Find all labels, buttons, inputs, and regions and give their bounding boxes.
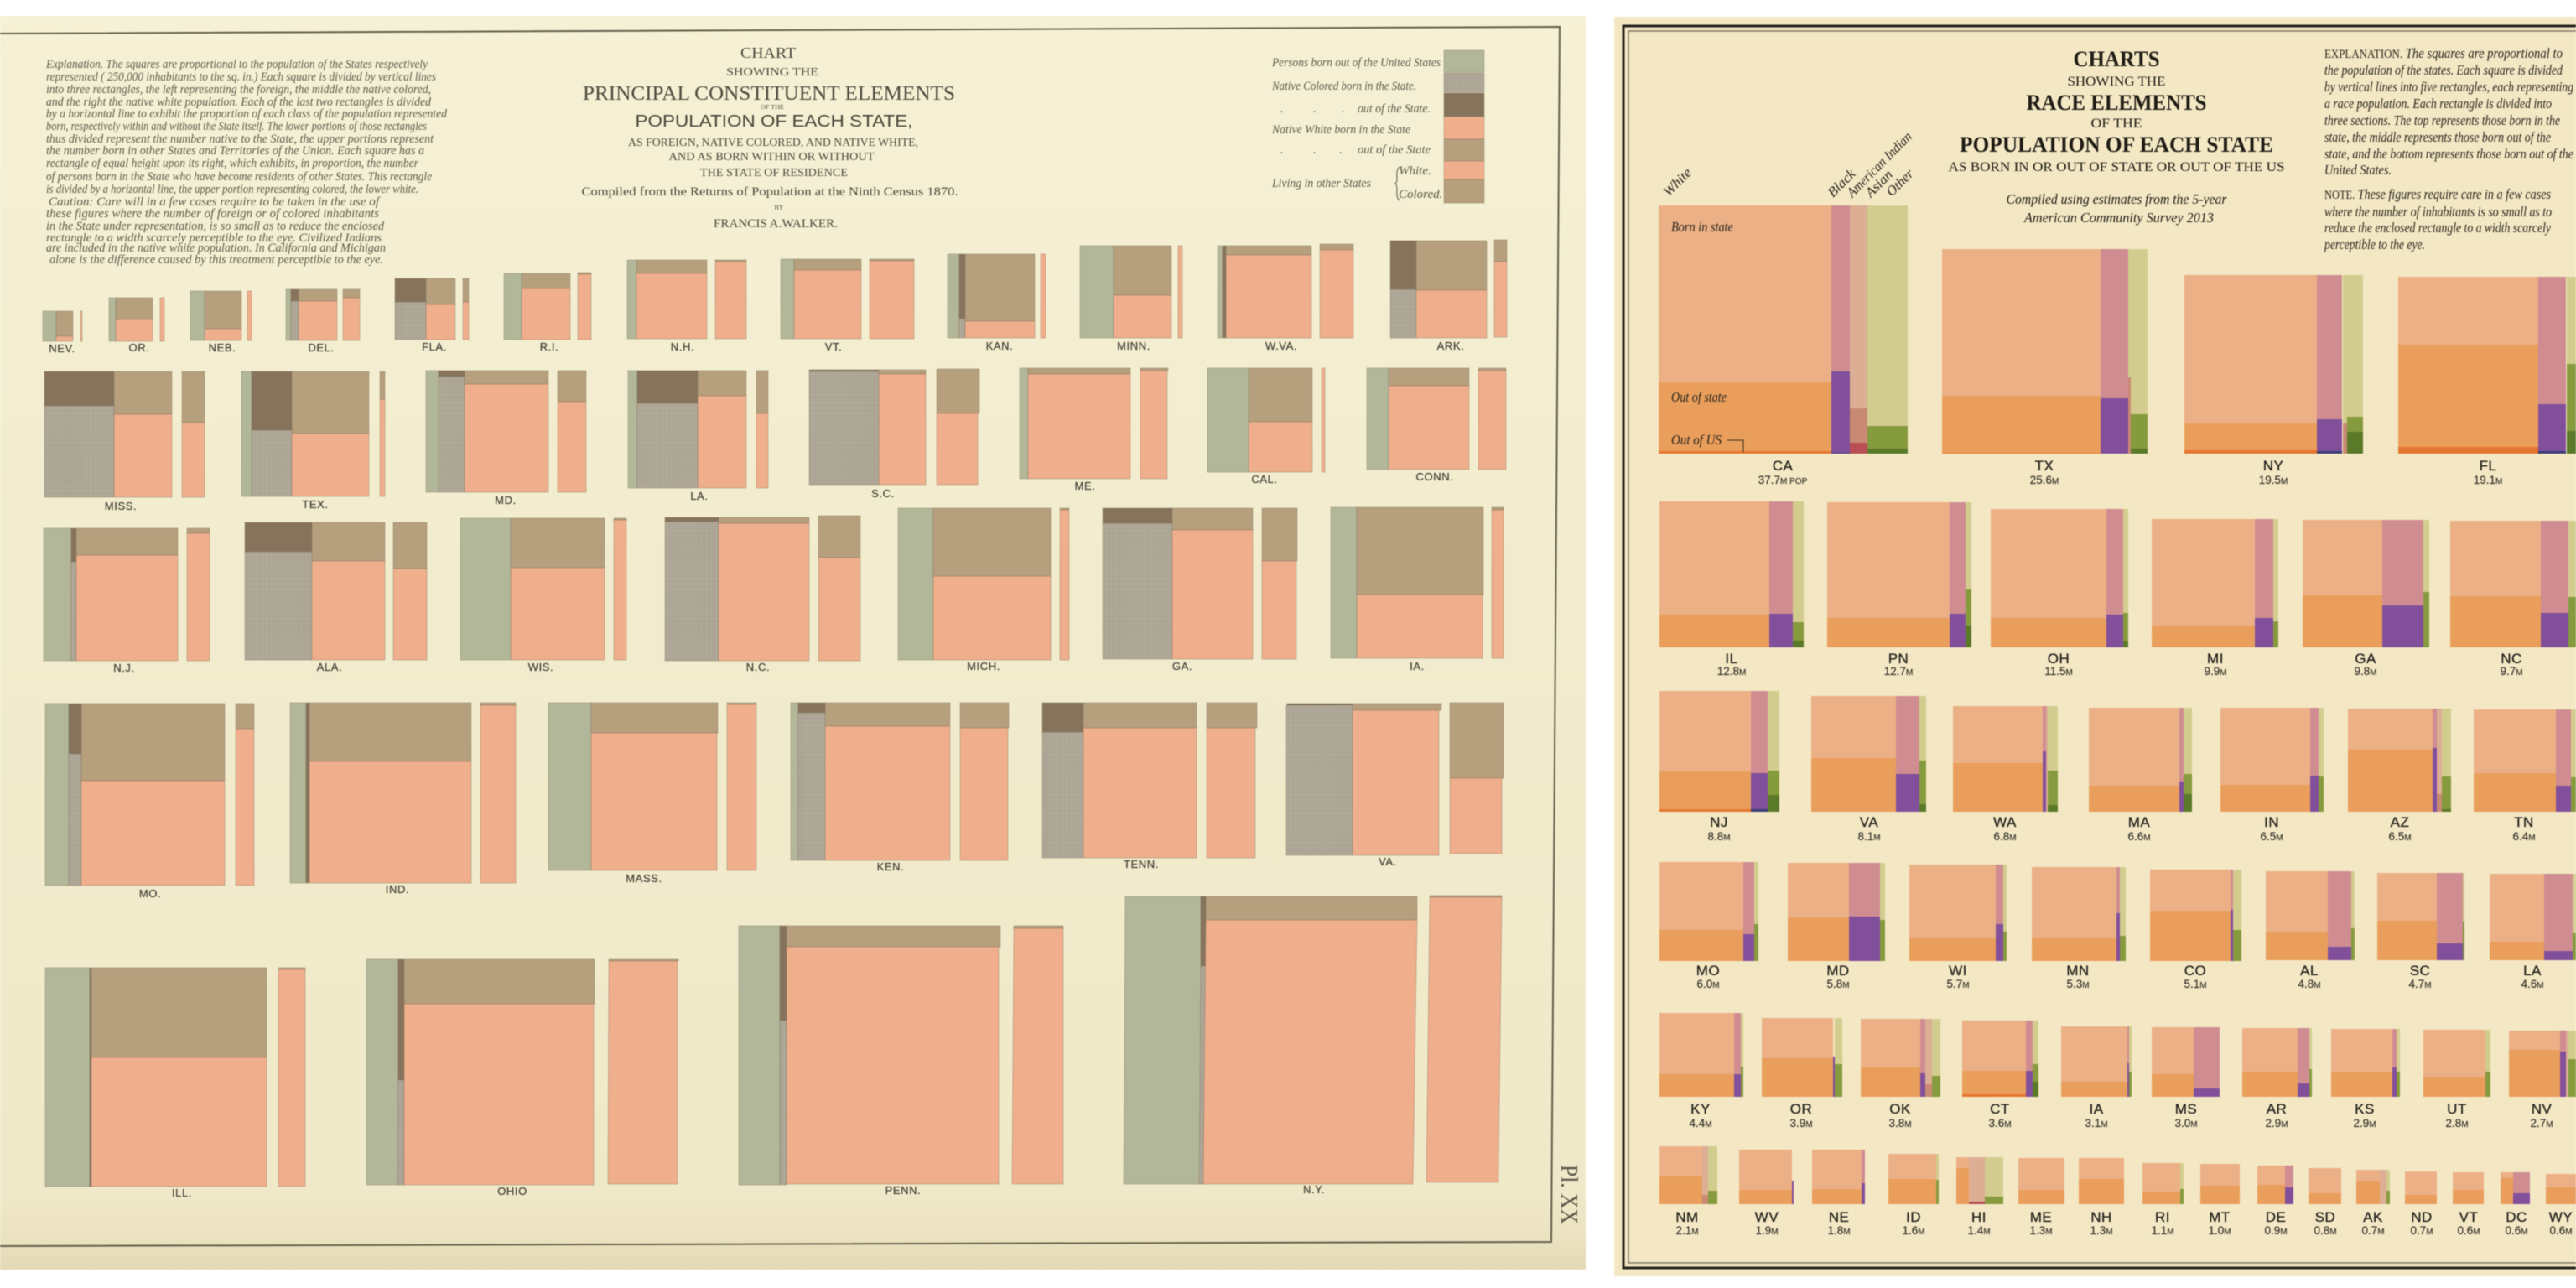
- chart: NEV: [43, 311, 82, 355]
- chart: NC (2013): 9.7M: [2500, 665, 2523, 678]
- chart: CA with column and row annotations: Other: [1883, 165, 1917, 200]
- legend: out of the State.: [1358, 102, 1431, 116]
- chart: MA: MA: [2128, 814, 2150, 830]
- chart: AR: [2242, 1028, 2312, 1130]
- chart: PN: PN: [1888, 651, 1909, 667]
- chart: NJ (2013): NJ: [1710, 814, 1728, 830]
- chart: LA (2013): [2490, 874, 2576, 990]
- chart: NH: N.H.: [671, 340, 694, 353]
- chart: WA: 6.8M: [1993, 830, 2017, 843]
- chart: DEL: [286, 289, 360, 354]
- chart: RI (2013): 1.1M: [2151, 1224, 2174, 1237]
- chart: OR (2013): OR: [1790, 1101, 1812, 1117]
- chart: CA with column and row annotations: Out of US: [1671, 432, 1722, 448]
- chart: MASS: MASS.: [626, 872, 662, 885]
- chart: SC: [809, 369, 979, 500]
- chart: FL: 19.1M: [2474, 474, 2502, 486]
- chart: KY: [1659, 1013, 1743, 1130]
- chart: ME (2013): 1.3M: [2029, 1224, 2053, 1237]
- chart: ID: ID: [1906, 1209, 1921, 1225]
- chart: AL: [2266, 871, 2355, 990]
- chart: MN: [2032, 867, 2126, 990]
- chart: DC: 0.6M: [2505, 1224, 2528, 1237]
- chart: MI: [2152, 519, 2278, 678]
- title block: SHOWING THE: [2068, 75, 2165, 89]
- chart: KAN: [948, 254, 1046, 352]
- note text: NOTE. These figures require care in a few cases: [2324, 186, 2551, 202]
- explanation text: by a horizontal line to exhibit the proportion of each class of the population represented: [46, 107, 447, 121]
- chart: NC: [665, 516, 860, 673]
- chart: ALA: ALA.: [317, 661, 342, 673]
- chart: ILL: [45, 968, 305, 1199]
- explanation text: United States.: [2324, 162, 2392, 178]
- chart: IA: IA.: [1410, 660, 1425, 673]
- chart: IL: 12.8M: [1717, 665, 1746, 678]
- chart: FLA: [395, 278, 469, 353]
- chart: NH: [627, 260, 746, 353]
- chart: PENN: [739, 926, 1063, 1197]
- chart: NY (1870): N.Y.: [1303, 1183, 1325, 1196]
- chart: MO (2013): MO: [1696, 963, 1720, 979]
- chart: AK: 0.7M: [2361, 1224, 2385, 1237]
- legend: Living in other States: [1271, 177, 1371, 190]
- chart: ID: [1888, 1154, 1939, 1237]
- chart: CO: CO: [2184, 963, 2206, 979]
- chart: NV: [2509, 1031, 2576, 1130]
- chart: DE: DE: [2266, 1209, 2286, 1225]
- chart: OH: 11.5M: [2044, 665, 2073, 678]
- legend: [1271, 50, 1484, 203]
- chart: DE: 0.9M: [2264, 1224, 2288, 1237]
- explanation text: born, respectively within and without the State itself. The lower portions of those rectangles: [46, 120, 427, 133]
- chart: OR (2013): [1762, 1018, 1842, 1130]
- chart: SC (2013): 4.7M: [2408, 978, 2432, 990]
- chart: NJ: N.J.: [113, 662, 135, 674]
- chart: MISS: MISS.: [105, 500, 137, 512]
- chart: AL: 4.8M: [2298, 978, 2321, 990]
- legend: .: [1339, 143, 1343, 157]
- chart: CA with column and row annotations: [1659, 128, 1917, 486]
- chart: VA (1870): VA.: [1379, 855, 1397, 868]
- chart: NJ: [44, 528, 210, 674]
- chart: ARK: [1390, 240, 1507, 352]
- explanation text: these figures where the number of foreign or of colored inhabitants: [46, 207, 379, 221]
- chart: RI: R.I.: [540, 340, 558, 353]
- chart: KEN: KEN.: [877, 860, 904, 873]
- chart: MINN: MINN.: [1117, 340, 1150, 352]
- chart: WA: [1953, 706, 2058, 843]
- chart: VA (2013): VA: [1860, 814, 1878, 830]
- chart: WIS: [460, 518, 626, 673]
- chart: MD: MD.: [495, 494, 517, 506]
- chart: HI: HI: [1971, 1209, 1987, 1225]
- chart: CA with column and row annotations: CA: [1773, 458, 1793, 474]
- chart: NEV: NEV.: [49, 342, 75, 355]
- chart: NE: [1812, 1150, 1865, 1237]
- chart: MI: 9.9M: [2204, 665, 2227, 678]
- chart: SC: S.C.: [871, 487, 895, 500]
- chart: VT (2013): 0.6M: [2457, 1224, 2480, 1237]
- chart: KY: 4.4M: [1689, 1117, 1712, 1130]
- title block: AS BORN IN OR OUT OF STATE OR OUT OF THE US: [1949, 160, 2284, 174]
- chart: PENN: PENN.: [886, 1184, 921, 1197]
- chart: CT: CT: [1990, 1101, 2010, 1117]
- chart: NY (1870): [1124, 896, 1502, 1196]
- chart: MT: 1.0M: [2208, 1224, 2231, 1237]
- chart: CA with column and row annotations: Asian: [1862, 167, 1896, 201]
- chart: TEX: [242, 371, 385, 511]
- chart: NJ (2013): 8.8M: [1707, 830, 1731, 843]
- legend: Persons born out of the United States: [1271, 56, 1441, 70]
- plate number: Pl. XX: [1555, 1165, 1581, 1224]
- chart: OR: OR.: [129, 341, 149, 354]
- explanation text: Caution: Care will in a few cases require to be taken in the use of: [49, 195, 381, 209]
- explanation text: Explanation. The squares are proportional to the population of the States respectively: [45, 58, 428, 71]
- chart: WY: 0.6M: [2549, 1224, 2573, 1237]
- chart: RI (2013): [2142, 1163, 2184, 1237]
- note text: perceptible to the eye.: [2324, 236, 2425, 252]
- title block: American Community Survey 2013: [2023, 210, 2214, 226]
- explanation text: [45, 58, 447, 267]
- chart: AL: AL: [2300, 963, 2319, 979]
- chart: OR (2013): 3.9M: [1789, 1117, 1813, 1130]
- chart: NY: NY: [2263, 458, 2283, 474]
- chart: KY: KY: [1690, 1101, 1711, 1117]
- chart: MD: [426, 371, 586, 506]
- chart: PN: [1827, 502, 1971, 678]
- chart: SD: 0.8M: [2314, 1224, 2337, 1237]
- chart: DC: DC: [2506, 1209, 2527, 1225]
- chart: NC (2013): NC: [2501, 651, 2522, 667]
- explanation text: represented ( 250,000 inhabitants to the sq. in.) Each square is divided by vertical lines: [46, 70, 436, 84]
- chart: AR: AR: [2267, 1101, 2287, 1117]
- chart: NH (2013): 1.3M: [2090, 1224, 2113, 1237]
- chart: MO (2013): 6.0M: [1696, 978, 1720, 990]
- chart: IN: [2220, 708, 2324, 843]
- chart: NH (2013): NH: [2090, 1209, 2112, 1225]
- chart: PN: 12.7M: [1884, 665, 1913, 678]
- chart: VT: [781, 259, 914, 353]
- panel: 1870 Walker chart: [0, 16, 1586, 1270]
- title block: PRINCIPAL CONSTITUENT ELEMENTS: [583, 83, 955, 105]
- legend: .: [1342, 102, 1345, 116]
- chart: CA with column and row annotations: White: [1659, 164, 1695, 200]
- chart: AK: AK: [2363, 1209, 2383, 1225]
- chart: MICH: MICH.: [967, 660, 1000, 673]
- chart: CAL: [1208, 368, 1325, 486]
- chart: CT: [1962, 1021, 2038, 1130]
- chart: NEB: NEB.: [209, 341, 236, 354]
- legend: White.: [1399, 164, 1431, 178]
- legend: Native Colored born in the State.: [1271, 80, 1416, 93]
- title block: OF THE: [2091, 117, 2142, 131]
- chart: CA with column and row annotations: Born in state: [1671, 219, 1733, 235]
- chart: AK: [2356, 1170, 2390, 1237]
- chart: MASS: [548, 703, 756, 885]
- chart: NE: 1.8M: [1827, 1224, 1851, 1237]
- explanation text: alone is the difference caused by this treatment perceptible to the eye.: [49, 253, 383, 267]
- chart: ILL: ILL.: [172, 1187, 192, 1199]
- chart: VA (2013): 8.1M: [1857, 830, 1881, 843]
- title block: AND AS BORN WITHIN OR WITHOUT: [669, 150, 875, 163]
- chart: KEN: [791, 703, 1009, 873]
- chart: NC: N.C.: [746, 661, 770, 673]
- chart: UT: 2.8M: [2445, 1117, 2469, 1130]
- chart: VA (2013): [1811, 696, 1926, 843]
- chart: CA with column and row annotations: Black: [1824, 165, 1859, 200]
- title block: Compiled from the Returns of Population at the Ninth Census 1870.: [582, 185, 958, 199]
- chart: OH: OH: [2048, 651, 2070, 667]
- explanation text: thus divided represent the number native to the State, the upper portions represent: [46, 132, 434, 146]
- chart: MT: [2200, 1164, 2240, 1237]
- legend: .: [1313, 102, 1317, 116]
- chart: ID: 1.6M: [1902, 1224, 1925, 1237]
- chart: VT (2013): VT: [2459, 1209, 2478, 1225]
- chart: VT (2013): [2453, 1172, 2484, 1237]
- chart: NV: NV: [2532, 1101, 2552, 1117]
- title block: BY: [774, 204, 784, 211]
- chart: ME: ME.: [1075, 480, 1095, 492]
- title block: OF THE: [761, 104, 784, 111]
- chart: LA (2013): 4.6M: [2521, 978, 2544, 990]
- chart: MS: MS: [2175, 1101, 2197, 1117]
- chart: FL: FL: [2480, 458, 2496, 474]
- chart: FL: [2398, 277, 2576, 486]
- chart: MN: MN: [2066, 963, 2090, 979]
- chart: WV: [1739, 1150, 1794, 1237]
- chart: NJ (2013): [1659, 691, 1779, 843]
- chart: MS: [2152, 1027, 2220, 1130]
- explanation text: are included in the native white population. In California and Michigan: [46, 242, 386, 255]
- chart: ARK: ARK.: [1437, 340, 1464, 352]
- chart: KS: 2.9M: [2353, 1117, 2376, 1130]
- chart: OK: 3.8M: [1888, 1117, 1912, 1130]
- title block: FRANCIS A.WALKER.: [714, 217, 838, 231]
- chart: LA: LA.: [690, 490, 709, 502]
- chart: MICH: [898, 508, 1069, 673]
- legend: Colored.: [1399, 188, 1442, 201]
- chart: ALA: [245, 522, 427, 673]
- chart: KAN: KAN.: [986, 340, 1013, 352]
- chart: CO: 5.1M: [2184, 978, 2207, 990]
- chart: OHIO: OHIO: [497, 1185, 527, 1197]
- chart: IL: IL: [1725, 651, 1738, 667]
- chart: CONN: CONN.: [1416, 470, 1453, 483]
- legend: Native White born in the State: [1271, 123, 1410, 137]
- chart: WA: WA: [1993, 814, 2017, 830]
- chart: IL: [1659, 501, 1804, 678]
- chart: MA: 6.6M: [2127, 830, 2151, 843]
- chart: NC (2013): [2450, 521, 2576, 678]
- chart: HI: [1956, 1157, 2003, 1237]
- legend: .: [1280, 143, 1284, 157]
- chart: WY: WY: [2549, 1209, 2573, 1225]
- title block: [582, 44, 958, 231]
- chart: VT: VT.: [825, 340, 842, 353]
- chart: TN: 6.4M: [2512, 830, 2536, 843]
- chart: CA with column and row annotations: 37.7M POP: [1758, 474, 1808, 486]
- chart: MINN: [1080, 246, 1182, 352]
- chart: TN: [2474, 709, 2576, 843]
- chart: LA (2013): LA: [2523, 963, 2542, 979]
- chart: GA (2013): [2303, 520, 2429, 678]
- explanation text: rectangle to a width scarcely perceptible to the eye. Civilized Indians: [46, 231, 382, 245]
- chart: CA with column and row annotations: Out of state: [1671, 389, 1727, 405]
- legend: .: [1313, 143, 1317, 157]
- explanation text: the number born in other States and Territories of the Union. Each square has a: [46, 144, 424, 158]
- chart: NM: 2.1M: [1675, 1224, 1699, 1237]
- chart: DC: [2501, 1172, 2530, 1237]
- chart: MD (2013): MD: [1826, 963, 1850, 979]
- chart: NV: 2.7M: [2530, 1117, 2553, 1130]
- title block: Compiled using estimates from the 5-year: [2006, 191, 2227, 207]
- chart: KS: [2331, 1029, 2400, 1130]
- chart: UT: UT: [2447, 1101, 2467, 1117]
- chart: CT: 3.6M: [1988, 1117, 2012, 1130]
- chart: MN: 5.3M: [2066, 978, 2090, 990]
- chart: IA (2013): [2061, 1026, 2132, 1130]
- chart: RI (2013): RI: [2155, 1209, 2170, 1225]
- chart: FLA: FLA.: [422, 340, 447, 353]
- chart: WV: 1.9M: [1755, 1224, 1779, 1237]
- chart: MD (2013): 5.8M: [1826, 978, 1850, 990]
- chart: MO: [45, 704, 254, 900]
- chart: TX: 25.6M: [2030, 474, 2059, 486]
- chart: ME (2013): ME: [2030, 1209, 2052, 1225]
- chart: MA: [2089, 708, 2192, 843]
- chart: OHIO: [366, 959, 678, 1197]
- chart: SC (2013): [2377, 873, 2464, 990]
- chart: RI: [504, 273, 591, 353]
- chart: W.VA: W.VA.: [1265, 340, 1297, 352]
- chart: GA: [1103, 508, 1297, 673]
- chart: MD (2013): [1788, 863, 1885, 990]
- title block: SHOWING THE: [726, 66, 818, 79]
- chart: NH (2013): [2079, 1158, 2124, 1237]
- explanation text: is divided by a horizontal line, the upper portion representing colored, the lower white.: [46, 183, 418, 196]
- chart: ND: [2405, 1171, 2437, 1237]
- title block: RACE ELEMENTS: [2026, 91, 2207, 115]
- chart: OK: [1861, 1019, 1940, 1130]
- chart: MO: MO.: [139, 887, 161, 900]
- title block: AS FOREIGN, NATIVE COLORED, AND NATIVE WHITE,: [628, 136, 918, 148]
- chart: NEB: [190, 291, 252, 354]
- chart: OR: [109, 298, 164, 354]
- explanation text: of persons born in the State who have become residents of other States. This rectangle: [46, 170, 432, 184]
- chart: MI: MI: [2207, 651, 2224, 667]
- chart: IA: [1331, 507, 1504, 673]
- title block: POPULATION OF EACH STATE: [1960, 132, 2273, 157]
- chart: SD: SD: [2315, 1209, 2335, 1225]
- chart: SC (2013): SC: [2410, 963, 2430, 979]
- chart: OH: [1991, 509, 2128, 678]
- chart: KS: KS: [2355, 1101, 2375, 1117]
- chart: IA (2013): 3.1M: [2085, 1117, 2108, 1130]
- chart: CONN: [1367, 368, 1506, 483]
- chart: OK: OK: [1889, 1101, 1911, 1117]
- chart: AZ: 6.5M: [2388, 830, 2412, 843]
- chart: GA (2013): 9.8M: [2354, 665, 2377, 678]
- chart: IA (2013): IA: [2089, 1101, 2104, 1117]
- chart: ME: [1020, 368, 1168, 492]
- chart: AZ: AZ: [2391, 814, 2409, 830]
- chart: DEL: DEL.: [308, 341, 335, 354]
- chart: SD: [2309, 1168, 2341, 1237]
- chart: CAL: CAL.: [1251, 473, 1278, 486]
- chart: MS: 3.0M: [2174, 1117, 2198, 1130]
- chart: NM: [1659, 1146, 1717, 1237]
- chart: MT: MT: [2209, 1209, 2231, 1225]
- chart: IN: 6.5M: [2260, 830, 2283, 843]
- chart: LA: [628, 371, 768, 502]
- explanation text: in the State under representation, is so small as to reduce the enclosed: [46, 220, 384, 233]
- chart: WV: WV: [1755, 1209, 1779, 1225]
- chart: TX: TX: [2035, 458, 2054, 474]
- chart: GA (2013): GA: [2355, 651, 2376, 667]
- chart: TEX: TEX.: [302, 498, 329, 511]
- chart: IND: IND.: [386, 883, 409, 896]
- title block: CHART: [740, 44, 796, 61]
- chart: W.VA: [1218, 244, 1353, 352]
- chart: MISS: [44, 371, 205, 512]
- chart: MO (2013): [1659, 862, 1758, 990]
- chart: HI: 1.4M: [1967, 1224, 1991, 1237]
- explanation text: into three rectangles, the left representing the foreign, the middle the native colored,: [46, 83, 431, 96]
- title block: THE STATE OF RESIDENCE: [700, 166, 848, 179]
- chart: GA: GA.: [1172, 660, 1192, 673]
- chart: WI: [1909, 865, 2007, 990]
- chart: ME (2013): [2018, 1158, 2064, 1237]
- chart: NY: 19.5M: [2259, 474, 2288, 486]
- explanation text: and the right the native white population. Each of the last two rectangles is divided: [46, 96, 431, 109]
- explanation text: EXPLANATION. The squares are proportional to: [2324, 45, 2563, 61]
- chart: UT: [2423, 1030, 2490, 1130]
- chart: NM: NM: [1675, 1209, 1699, 1225]
- chart: WI: WI: [1949, 963, 1967, 979]
- panel: 2013 race elements chart: [1614, 17, 2576, 1276]
- legend: .: [1280, 102, 1284, 116]
- chart: AR: 2.9M: [2265, 1117, 2288, 1130]
- chart: TN: TN: [2514, 814, 2534, 830]
- chart: TENN: TENN.: [1124, 858, 1159, 870]
- chart: NE: NE: [1829, 1209, 1849, 1225]
- explanation text: [2324, 45, 2573, 178]
- chart: IN: IN: [2264, 814, 2279, 830]
- chart: WIS: WIS.: [528, 661, 553, 673]
- chart: TENN: [1042, 703, 1257, 870]
- chart: CA with column and row annotations: American Indian: [1843, 128, 1915, 200]
- title block: POPULATION OF EACH STATE,: [636, 112, 912, 131]
- chart: IND: [290, 703, 516, 896]
- explanation text: rectangle of equal height upon its right, which exhibits, in proportion, the number: [46, 157, 418, 170]
- chart: AZ: [2348, 709, 2451, 843]
- note text: [2324, 186, 2552, 252]
- chart: WI: 5.7M: [1946, 978, 1970, 990]
- chart: TX: [1942, 249, 2148, 486]
- chart: NY: [2184, 275, 2363, 486]
- chart: ND: ND: [2411, 1209, 2433, 1225]
- legend: out of the State: [1358, 143, 1431, 157]
- chart: CO: [2150, 870, 2241, 990]
- chart: VA (1870): [1286, 703, 1504, 868]
- chart: DE: [2257, 1166, 2293, 1237]
- title block: CHARTS: [2073, 47, 2160, 71]
- title block: [1949, 47, 2284, 226]
- chart: WY: [2546, 1174, 2576, 1237]
- chart: ND: 0.7M: [2410, 1224, 2433, 1237]
